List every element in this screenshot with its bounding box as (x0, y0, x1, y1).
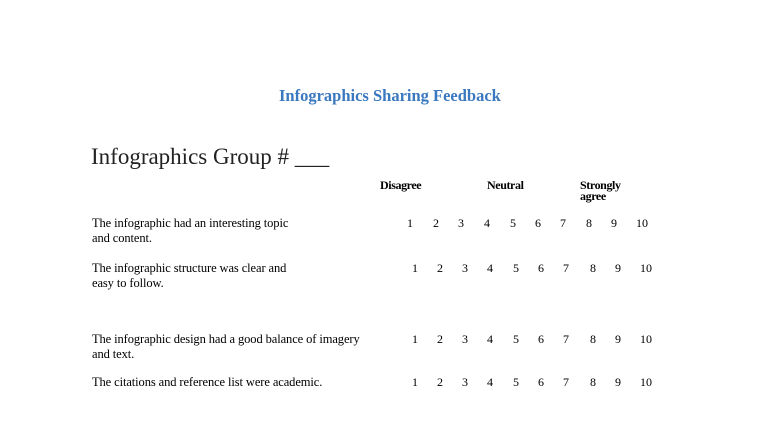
row 3 scale: 6 (538, 332, 544, 346)
row 3 statement: and text. (92, 347, 134, 361)
scale labels: Neutral (487, 178, 524, 192)
row 3 scale: 1 (412, 332, 418, 346)
row 4 statement: The citations and reference list were academic. (92, 375, 322, 389)
row 2 scale: 5 (513, 261, 519, 275)
row 3 scale: 4 (487, 332, 493, 346)
row 3 statement (92, 332, 360, 361)
row 1 scale: 2 (433, 216, 439, 230)
row 1 scale: 9 (611, 216, 617, 230)
row 3 scale: 5 (513, 332, 519, 346)
row 1 scale: 7 (560, 216, 566, 230)
row 4 scale (412, 375, 652, 389)
row 2 scale: 9 (615, 261, 621, 275)
row 4 scale: 3 (462, 375, 468, 389)
row 3 scale (412, 332, 652, 346)
row 4 scale: 6 (538, 375, 544, 389)
row 2 scale: 10 (640, 261, 652, 275)
row 1 scale: 5 (510, 216, 516, 230)
row 2 scale: 8 (590, 261, 596, 275)
row 2 statement: easy to follow. (92, 276, 164, 290)
row 1 scale: 6 (535, 216, 541, 230)
row 4 scale: 10 (640, 375, 652, 389)
row 3 scale: 3 (462, 332, 468, 346)
row 1 statement: The infographic had an interesting topic (92, 216, 288, 230)
scale labels: Disagree (380, 178, 421, 192)
row 2 statement: The infographic structure was clear and (92, 261, 286, 275)
row 3 scale: 2 (437, 332, 443, 346)
row 2 statement (92, 261, 286, 290)
row 3 scale: 10 (640, 332, 652, 346)
row 3 scale: 9 (615, 332, 621, 346)
row 4 scale: 8 (590, 375, 596, 389)
row 3 statement: The infographic design had a good balance of imagery (92, 332, 360, 346)
row 4 scale: 5 (513, 375, 519, 389)
row 1 scale: 3 (458, 216, 464, 230)
row 4 scale: 9 (615, 375, 621, 389)
row 1 statement: and content. (92, 231, 152, 245)
row 4 scale: 7 (563, 375, 569, 389)
title: Infographics Sharing Feedback (279, 86, 501, 105)
row 3 scale: 7 (563, 332, 569, 346)
row 3 scale: 8 (590, 332, 596, 346)
row 2 scale: 2 (437, 261, 443, 275)
row 1 scale: 1 (407, 216, 413, 230)
heading: group: Infographics Group # ___ (91, 144, 329, 169)
row 2 scale: 7 (563, 261, 569, 275)
row 4 scale: 4 (487, 375, 493, 389)
scale labels (380, 178, 621, 203)
row 1 scale (407, 216, 648, 230)
row 2 scale: 3 (462, 261, 468, 275)
row 1 statement (92, 216, 288, 245)
row 2 scale: 4 (487, 261, 493, 275)
row 1 scale: 10 (636, 216, 648, 230)
row 2 scale: 1 (412, 261, 418, 275)
row 1 scale: 8 (586, 216, 592, 230)
row 4 scale: 2 (437, 375, 443, 389)
scale labels: Strongly (580, 178, 621, 192)
row 1 scale: 4 (484, 216, 490, 230)
row 2 scale: 6 (538, 261, 544, 275)
row 4 scale: 1 (412, 375, 418, 389)
row 2 scale (412, 261, 652, 275)
scale labels: agree (580, 189, 606, 203)
